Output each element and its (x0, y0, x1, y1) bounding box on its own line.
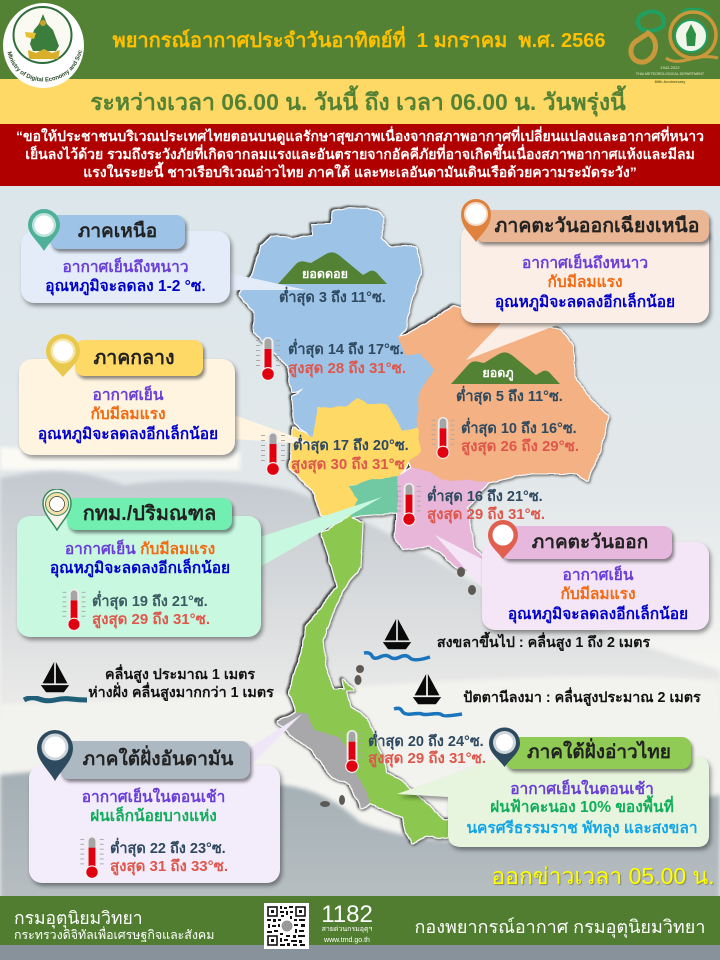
thermometer (397, 483, 421, 526)
heading bar (75, 340, 203, 376)
icon: wave (394, 706, 462, 718)
rain text: ฝนเล็กน้อยบางแห่ง (90, 808, 217, 825)
heading bar: ภาคตะวันออก (532, 532, 648, 553)
high east: สูงสุด 29 ถึง 31°ซ. (427, 506, 545, 523)
heading bar (67, 498, 232, 530)
heading bar: ภาคเหนือ (78, 221, 157, 242)
low bangkok: ต่ำสุด 19 ถึง 21°ซ. (92, 594, 208, 610)
heading bar: ภาคใต้ฝั่งอ่าวไทย (527, 742, 671, 763)
thermometer (261, 432, 285, 476)
ministry name: กระทรวงดิจิทัลเพื่อเศรษฐกิจและสังคม (14, 928, 214, 942)
title: พยากรณ์อากาศประจำวันอาทิตย์ที่ 1 มกราคม พ.ศ. 2566 (113, 30, 605, 52)
labels: northeast temperatures (456, 366, 579, 456)
header band (0, 0, 720, 79)
icon: wave (23, 696, 87, 704)
logo: 80th anniversary: THAI METEOROLOGICAL DEPARTMENT (636, 72, 705, 76)
warning band: เย็นลงไว้ด้วย รวมถึงระวังภัยที่เกิดจากลมแรงและอันตรายจากอัคคีภัยที่อาจเกิดขึ้นเนื่องสภาพอากาศแห้งและมีลม (25, 146, 695, 162)
heading bar: ภาคตะวันออกเฉียงเหนือ (495, 215, 699, 237)
panel: bangkok and vicinity (16, 489, 382, 643)
weather and wind text: อากาศเย็น กับมีลมแรง (65, 541, 215, 558)
icon: pin (488, 520, 518, 559)
website: www.tmd.go.th (324, 937, 370, 944)
mountain: ยอดดอย (278, 252, 387, 284)
heading bar (50, 215, 185, 249)
temperature change text: อุณหภูมิจะลดลงอีกเล็กน้อย (50, 560, 230, 577)
warning band: “ขอให้ประชาชนบริเวณประเทศไทยตอนบนดูแลรักษาสุขภาพเนื่องจากสภาพอากาศที่เปลี่ยนแปลงและอากาศที่หนาว (16, 128, 704, 144)
wave forecast: andaman (23, 662, 274, 704)
weather text: อากาศเย็นถึงหนาว (62, 259, 189, 276)
weather text: อากาศเย็นในตอนเช้า (510, 781, 654, 798)
wave forecast: lower gulf (394, 674, 701, 718)
thermometer (80, 836, 104, 879)
wind text: กับมีลมแรง (90, 406, 166, 423)
panel: south andaman (28, 714, 302, 888)
region: south (290, 517, 470, 843)
weather text: อากาศเย็นถึงหนาว (522, 255, 648, 272)
panel: north (20, 209, 306, 309)
icon: pin (37, 730, 73, 781)
map of Thailand (240, 208, 607, 843)
logo: 80th anniversary: 80th Anniversary (655, 80, 686, 84)
high northeast: สูงสุด 26 ถึง 29°ซ. (461, 438, 579, 455)
forecast bureau: กองพยากรณ์อากาศ กรมอุตุนิยมวิทยา (415, 917, 705, 937)
panel body (29, 765, 280, 883)
footer (0, 896, 720, 945)
wave text line 2: ห่างฝั่ง คลื่นสูงมากกว่า 1 เมตร (88, 685, 274, 701)
wave text line 1: คลื่นสูง ประมาณ 1 เมตร (105, 667, 255, 683)
icon: pin (42, 489, 72, 531)
heading bar (60, 741, 250, 779)
panel body (21, 231, 230, 303)
region: east (395, 468, 490, 567)
region: northeast (398, 307, 607, 482)
logo: 80th anniversary (628, 8, 718, 84)
weather text: อากาศเย็น (563, 567, 633, 584)
central temperatures (261, 432, 409, 476)
temperature change text: อุณหภูมิจะลดลงอีกเล็กน้อย (38, 426, 218, 443)
panel: central (18, 334, 316, 461)
wind text: กับมีลมแรง (560, 586, 636, 603)
icon: pin (46, 334, 80, 377)
islands (320, 567, 476, 807)
low andaman: ต่ำสุด 22 ถึง 23°ซ. (110, 841, 226, 857)
panel body (17, 516, 261, 637)
high north: สูงสุด 28 ถึง 31°ซ. (288, 360, 406, 377)
labels: north temperatures (279, 267, 406, 378)
heading bar (500, 526, 672, 559)
region: north (240, 208, 435, 438)
panel: east (435, 520, 714, 636)
wave text: สงขลาขึ้นไป : คลื่นสูง 1 ถึง 2 เมตร (437, 635, 650, 651)
icon: wave (364, 651, 430, 662)
thermometer (62, 589, 86, 631)
mountain: ยอดภู (451, 352, 560, 384)
low northeast: ต่ำสุด 10 ถึง 16°ซ. (461, 421, 577, 437)
logo: 80th anniversary: 1942-2022 (660, 65, 680, 70)
heading bar (505, 737, 691, 769)
department name: กรมอุตุนิยมวิทยา (14, 908, 143, 928)
hotline caption: สายด่วนกรมอุตุฯ (322, 926, 372, 933)
panel: northeast (460, 199, 714, 360)
weather text: อากาศเย็นในตอนเช้า (82, 789, 225, 806)
panel body (461, 225, 709, 323)
mountain temp north: ต่ำสุด 3 ถึง 11°ซ. (279, 290, 386, 306)
high south: สูงสุด 29 ถึง 31°ซ. (368, 750, 486, 767)
east temperatures (397, 483, 545, 526)
icon: boat (382, 619, 412, 650)
thermometer: north (256, 337, 280, 381)
label: ยอดดอย: ยอดดอย (302, 267, 348, 281)
low east: ต่ำสุด 16 ถึง 21°ซ. (427, 489, 543, 505)
rain text: ฝนฟ้าคะนอง 10% ของพื้นที่ (490, 799, 674, 816)
hotline number: 1182 (321, 901, 373, 928)
mountain temp northeast: ต่ำสุด 5 ถึง 11°ซ. (456, 389, 563, 405)
temperature change text: อุณหภูมิจะลดลงอีกเล็กน้อย (508, 606, 688, 623)
icon: pin (461, 199, 491, 242)
region: south andaman (278, 713, 370, 808)
qr code (264, 903, 309, 949)
high bangkok: สูงสุด 29 ถึง 31°ซ. (92, 611, 210, 628)
warning band: แรงในระยะนี้ ชาวเรือบริเวณอ่าวไทย ภาคใต้ และทะเลอันดามันเดินเรือด้วยความระมัดระวัง” (83, 164, 637, 180)
south temperatures (340, 730, 486, 773)
panel body (482, 542, 709, 630)
time range text: ระหว่างเวลา 06.00 น. วันนี้ ถึง เวลา 06.00 น. วันพรุ่งนี้ (90, 89, 626, 115)
region: bangkok (350, 477, 398, 517)
low north: ต่ำสุด 14 ถึง 17°ซ. (288, 342, 404, 358)
time range band (0, 79, 720, 124)
low south: ต่ำสุด 20 ถึง 24°ซ. (368, 734, 484, 750)
warning band (0, 124, 720, 186)
icon: boat (40, 662, 70, 692)
bottom strip (0, 945, 720, 960)
wave text: ปัตตานีลงมา : คลื่นสูงประมาณ 2 เมตร (463, 690, 701, 706)
temperature change text: อุณหภูมิจะลดลงอีกเล็กน้อย (495, 294, 675, 311)
thermometer: northeast (432, 417, 454, 459)
issue time: ออกข่าวเวลา 05.00 น. (491, 863, 715, 889)
panel: south gulf of thailand (397, 728, 714, 852)
temperature change text: อุณหภูมิจะลดลง 1-2 °ซ. (45, 278, 206, 295)
low central: ต่ำสุด 17 ถึง 20°ซ. (293, 438, 409, 454)
label: ยอดภู: ยอดภู (482, 366, 514, 380)
icon: pin (489, 728, 520, 767)
icon: pin (28, 209, 60, 251)
region: central (290, 398, 420, 517)
high central: สูงสุด 30 ถึง 31°ซ (291, 456, 405, 473)
icon: boat (412, 674, 442, 704)
wind text: กับมีลมแรง (547, 274, 623, 291)
wave forecast: upper gulf (364, 619, 650, 662)
weather text: อากาศเย็น (93, 387, 163, 404)
heading bar: ภาคกลาง (93, 347, 175, 369)
areas text: นครศรีธรรมราช พัทลุง และสงขลา (466, 820, 698, 837)
panel body (19, 359, 235, 455)
heading bar: ภาคใต้ฝั่งอันดามัน (83, 749, 233, 770)
heading bar: กทม./ปริมณฑล (83, 503, 216, 525)
heading bar (475, 210, 709, 242)
thermometer (340, 730, 364, 773)
high andaman: สูงสุด 31 ถึง 33°ซ. (110, 858, 228, 875)
